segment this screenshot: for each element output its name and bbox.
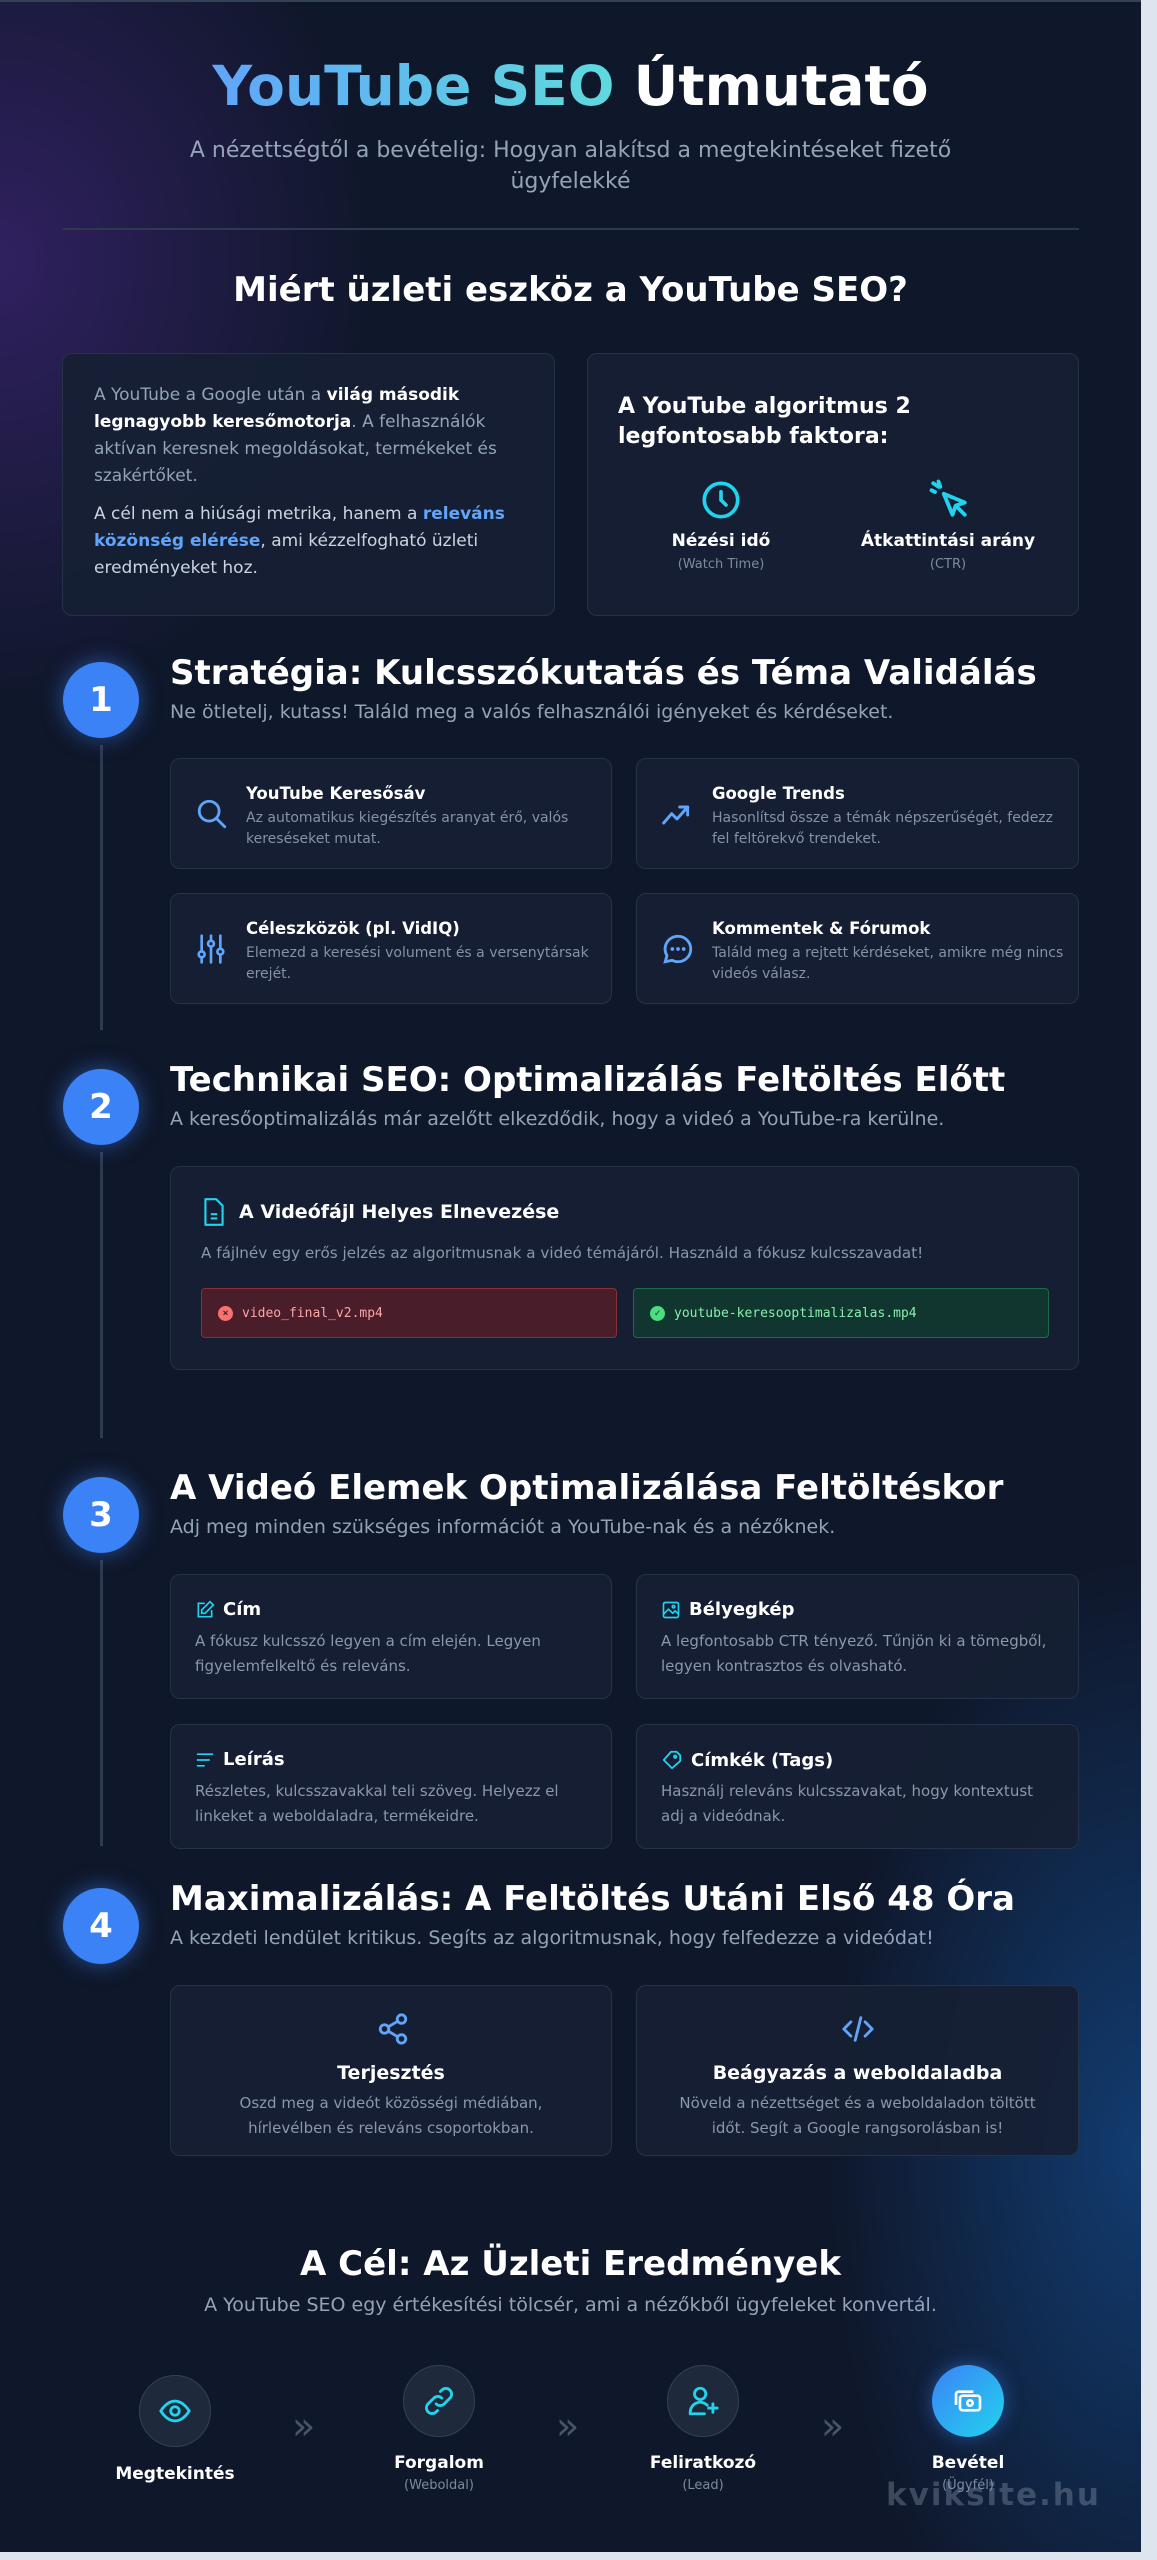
funnel step: views: Megtekintés [115, 2464, 235, 2484]
step number 2 [63, 1069, 139, 1145]
icon: cursor click [930, 480, 967, 517]
funnel step: revenue: (Ügyfél) [942, 2478, 994, 2493]
step number 4: 4 [89, 1906, 113, 1946]
factor: watch time [672, 531, 770, 572]
step number 3 [63, 1477, 139, 1553]
file naming heading: A Videófájl Helyes Elnevezése [239, 1201, 559, 1223]
bad filename: video_final_v2.mp4 [242, 1306, 383, 1320]
step number 1: 1 [89, 680, 113, 720]
card: tools: Elemezd a keresési volument és a versenytársak erejét. [246, 945, 589, 982]
card: thumbnail: Bélyegkép [689, 1599, 795, 1620]
card: tools: Céleszközök (pl. VidIQ) [246, 919, 460, 938]
file naming description: A fájlnév egy erős jelzés az algoritmusnak a videó témájáról. Használd a fókusz kulcsszavadat! [201, 1244, 923, 1262]
factor: watch time: Nézési idő [672, 531, 770, 551]
arrow: » [821, 2404, 844, 2448]
arrow: » [556, 2404, 579, 2448]
good filename [633, 1288, 1049, 1338]
subtitle: A nézettségtől a bevételig: Hogyan alakítsd a megtekintéseket fizető ügyfelekké [190, 138, 951, 194]
card: distribution [170, 1985, 612, 2156]
card: description: Részletes, kulcsszavakkal teli szöveg. Helyezz el linkeket a weboldaladra, termékeidre. [195, 1782, 559, 1825]
panel: file naming [170, 1166, 1079, 1370]
funnel step: traffic: (Weboldal) [404, 2478, 474, 2493]
card: title [170, 1574, 612, 1699]
section 1 subtitle: Ne ötletelj, kutass! Találd meg a valós felhasználói igényeket és kérdéseket. [170, 701, 893, 723]
card: title: A fókusz kulcsszó legyen a cím elején. Legyen figyelemfelkeltő és releváns. [195, 1632, 541, 1675]
section 2 [50, 1056, 1079, 1438]
bad filename [201, 1288, 617, 1338]
panel: intro text [62, 353, 555, 616]
factor: CTR: Átkattintási arány [861, 531, 1035, 551]
heading: why: Miért üzleti eszköz a YouTube SEO? [233, 270, 908, 310]
card: google trends: Hasonlítsd össze a témák népszerűségét, fedezz fel feltörekvő trendeket. [712, 810, 1053, 847]
step number 4 [63, 1888, 139, 1964]
icon: clock [702, 482, 740, 518]
good filename: ✓ [654, 1308, 661, 1318]
funnel step: subscriber: Feliratkozó [650, 2453, 756, 2473]
section 3 heading: A Videó Elemek Optimalizálása Feltöltéskor [170, 1468, 1003, 1508]
card: thumbnail [636, 1574, 1079, 1699]
funnel step: subscriber [650, 2365, 756, 2493]
card: google trends: Google Trends [712, 784, 845, 803]
step number 3: 3 [89, 1495, 113, 1535]
arrow: » [292, 2404, 315, 2448]
funnel step: traffic [394, 2365, 484, 2493]
funnel [115, 2355, 1014, 2493]
factor: watch time: (Watch Time) [678, 557, 764, 572]
results subtitle: A YouTube SEO egy értékesítési tölcsér, ami a nézőkből ügyfeleket konvertál. [204, 2294, 937, 2316]
step number 2: 2 [89, 1087, 113, 1127]
funnel step: views [115, 2375, 235, 2484]
panel: intro text: A YouTube a Google után a világ második legnagyobb keresőmotorja. A felhasználók aktívan keresnek megoldásokat, termékeket és szakértőket. A cél nem a hiúsági metrika, hanem a releváns közönség elérése, ami kézzelfogható üzleti eredményeket hoz. [94, 385, 505, 578]
section 2 heading: Technikai SEO: Optimalizálás Feltöltés Előtt [170, 1060, 1005, 1100]
section 4 subtitle: A kezdeti lendület kritikus. Segíts az algoritmusnak, hogy felfedezze a videódat! [170, 1927, 934, 1949]
section 1 heading: Stratégia: Kulcsszókutatás és Téma Validálás [170, 653, 1037, 693]
card: embedding [636, 1985, 1079, 2156]
card: tools [170, 893, 612, 1004]
card: tags: Használj releváns kulcsszavakat, hogy kontextust adj a videódnak. [661, 1782, 1033, 1825]
card: youtube search: Az automatikus kiegészítés aranyat érő, valós kereséseket mutat. [246, 810, 568, 847]
card: youtube search [170, 758, 612, 869]
card: comments: Találd meg a rejtett kérdéseket, amikre még nincs videós válasz. [712, 945, 1063, 982]
panel: algorithm factors [587, 353, 1079, 616]
card: tags [636, 1724, 1079, 1849]
bad filename: × [222, 1308, 229, 1318]
factor heading: A YouTube algoritmus 2 [618, 394, 911, 419]
section 3 subtitle: Adj meg minden szükséges információt a YouTube-nak és a nézőknek. [170, 1516, 835, 1538]
section 1 [50, 649, 1079, 1030]
card: thumbnail: A legfontosabb CTR tényező. Tűnjön ki a tömegből, legyen kontrasztos és olvasható. [661, 1632, 1046, 1675]
card: embedding: Beágyazás a weboldaladba [713, 2062, 1002, 2084]
card: youtube search: YouTube Keresősáv [246, 784, 425, 803]
card: description [170, 1724, 612, 1849]
factor: CTR [861, 530, 1035, 572]
card: distribution: Oszd meg a videót közösségi médiában, hírlevélben és releváns csoportokban. [240, 2094, 542, 2137]
section 3 [50, 1464, 1079, 1849]
funnel step: revenue [922, 2355, 1014, 2493]
section 2 subtitle: A keresőoptimalizálás már azelőtt elkezdődik, hogy a videó a YouTube-ra kerülne. [170, 1108, 944, 1130]
step number 1 [63, 662, 139, 738]
heading: business results: A Cél: Az Üzleti Eredmények [300, 2244, 841, 2284]
card: title: Cím [223, 1599, 261, 1620]
card: comments: Kommentek & Fórumok [712, 919, 930, 938]
factor: CTR: (CTR) [930, 557, 966, 572]
card: description: Leírás [223, 1749, 285, 1770]
card: distribution: Terjesztés [337, 2062, 445, 2084]
watermark: kviksite.hu [886, 2477, 1101, 2513]
section 4 heading: Maximalizálás: A Feltöltés Utáni Első 48 Óra [170, 1879, 1015, 1919]
factor heading [618, 394, 911, 449]
section 4 [50, 1874, 1079, 2156]
card: embedding: Növeld a nézettséget és a weboldaladon töltött időt. Segít a Google rangsorolásban is! [679, 2094, 1036, 2137]
factor heading: legfontosabb faktora: [618, 424, 888, 449]
funnel step: revenue: Bevétel [932, 2453, 1004, 2473]
title: YouTube SEO Útmutató [212, 54, 929, 118]
good filename: youtube-keresooptimalizalas.mp4 [674, 1306, 917, 1320]
funnel step: subscriber: (Lead) [682, 2478, 724, 2493]
card: tags: Címkék (Tags) [691, 1750, 833, 1770]
card: google trends [636, 758, 1079, 869]
funnel step: traffic: Forgalom [394, 2453, 484, 2473]
card: comments [636, 893, 1079, 1004]
